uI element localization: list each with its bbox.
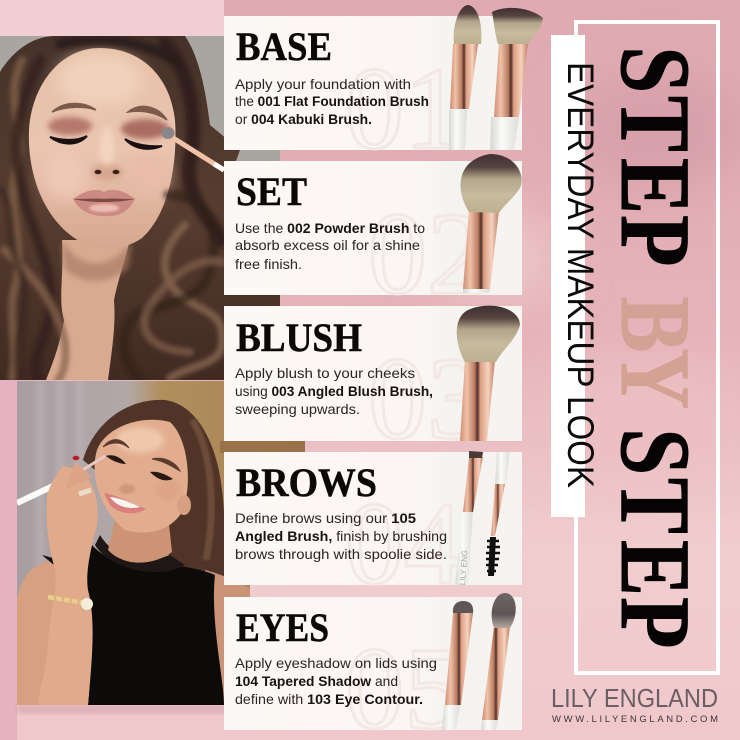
icon: eye contour brush <box>481 593 516 730</box>
text: brows: Define brows using our 105 <box>235 510 416 526</box>
text: base: the 001 Flat Foundation Brush <box>235 93 429 109</box>
heading: base: BASE <box>236 24 332 69</box>
neck <box>108 520 172 563</box>
face <box>95 420 188 533</box>
smile <box>104 493 146 513</box>
photo: woman with wavy hair and eye brush <box>0 36 290 386</box>
panel: base <box>224 16 522 174</box>
website: WWW.LILYENGLAND.COM <box>552 714 718 725</box>
hair mass <box>0 36 280 380</box>
text: set <box>235 220 425 272</box>
text: eyes: 104 Tapered Shadow and <box>235 673 398 689</box>
face <box>29 48 176 249</box>
title: step by step: BY <box>600 296 711 409</box>
title frame <box>576 22 718 673</box>
bracelet <box>48 597 90 604</box>
ear <box>177 495 191 515</box>
title: step by step: STEP <box>600 46 711 266</box>
text: blush <box>235 365 433 417</box>
ghost number: 01: 01 <box>345 43 463 174</box>
icon: flat foundation brush <box>449 5 481 150</box>
icon: kabuki brush <box>490 8 543 150</box>
title: step by step <box>600 46 711 648</box>
brows and eyes <box>103 440 129 448</box>
hand and forearm <box>39 466 98 705</box>
panel: eyes <box>224 597 522 740</box>
icon: tapered shadow brush <box>442 601 473 730</box>
panel: blush <box>224 306 522 464</box>
ghost number: 03: 03 <box>368 333 486 464</box>
text: base: Apply your foundation with <box>235 76 411 92</box>
text: brows: brows through with spoolie side. <box>235 546 447 562</box>
icon: angled blush brush <box>457 306 520 441</box>
panel: brows <box>224 452 522 609</box>
hair strands <box>2 40 222 380</box>
text: set: free finish. <box>235 256 302 272</box>
text: blush: sweeping upwards. <box>235 401 360 417</box>
subtitle band <box>551 35 601 517</box>
brush label: LILY ENG <box>458 550 469 585</box>
nose <box>119 484 135 494</box>
hair <box>83 400 224 578</box>
eye brush <box>170 136 224 170</box>
text: brows <box>235 510 447 562</box>
black dress <box>42 545 224 705</box>
neck and chest <box>46 240 130 380</box>
text: eyes: define with 103 Eye Contour. <box>235 691 423 707</box>
subtitle: EVERYDAY MAKEUP LOOK <box>560 62 601 488</box>
brand logo: LILY ENGLAND <box>551 683 718 713</box>
photo: woman applying brow brush <box>17 381 310 711</box>
shoulders and arms <box>17 560 89 705</box>
icon: spoolie brush <box>486 452 510 576</box>
brand logo <box>551 683 718 725</box>
text: base: or 004 Kabuki Brush. <box>235 111 372 127</box>
heading: set: SET <box>236 169 307 214</box>
eyebrows <box>52 104 96 112</box>
lips <box>73 190 135 216</box>
text: set: Use the 002 Powder Brush to <box>235 220 425 236</box>
text: eyes: Apply eyeshadow on lids using <box>235 655 437 671</box>
text: blush: using 003 Angled Blush Brush, <box>235 383 433 399</box>
heading: eyes: EYES <box>236 605 329 650</box>
text: brows: Angled Brush, finish by brushing <box>235 528 447 544</box>
text: eyes <box>235 655 437 707</box>
text: set: absorb excess oil for a shine <box>235 237 420 253</box>
panel: set <box>224 161 522 319</box>
nose <box>100 128 114 169</box>
eyeshadow <box>48 117 92 135</box>
ghost number: 02: 02 <box>368 188 486 319</box>
eyes closed lashes <box>50 136 87 144</box>
text: base <box>235 76 429 127</box>
brow brush <box>17 483 52 506</box>
ghost number: 04: 04 <box>345 478 463 609</box>
text: blush: Apply blush to your cheeks <box>235 365 415 381</box>
icon: powder brush <box>461 154 522 293</box>
heading: brows: BROWS <box>236 460 377 505</box>
heading: blush: BLUSH <box>236 315 362 360</box>
icon: angled brow brush <box>455 451 483 585</box>
ring <box>79 490 91 494</box>
title: step by step: STEP <box>600 428 711 648</box>
